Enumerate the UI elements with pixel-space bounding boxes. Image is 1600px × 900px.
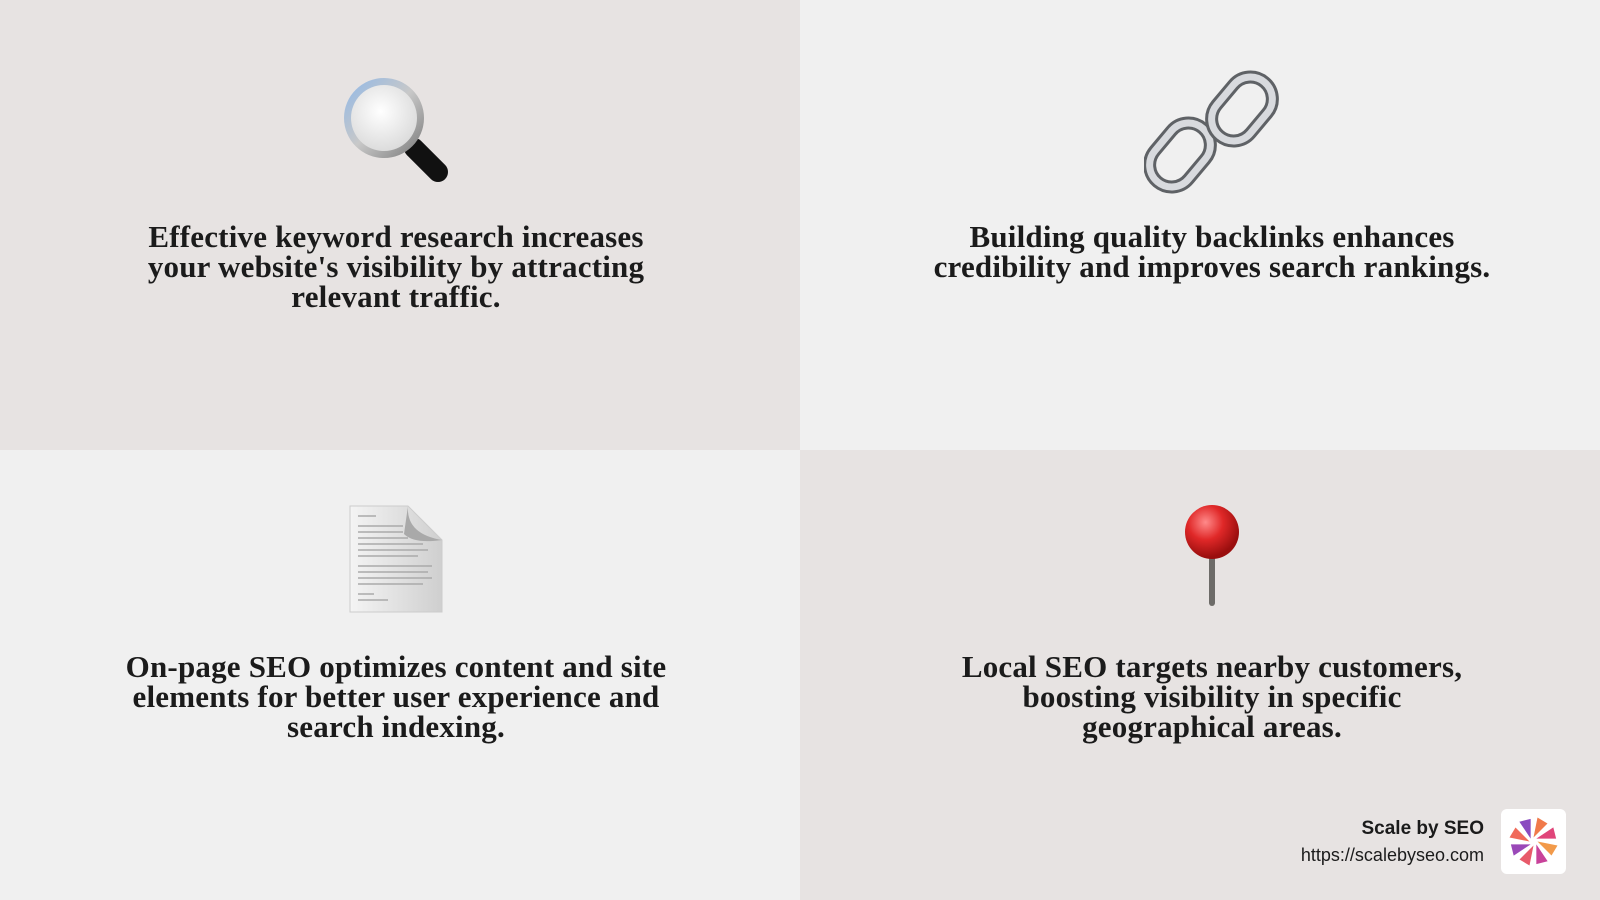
icon: chain link xyxy=(1144,70,1279,194)
text: local SEO: geographical areas. xyxy=(1082,709,1342,744)
text: backlinks: credibility and improves search rankings. xyxy=(934,249,1490,284)
text: keyword research xyxy=(148,219,644,314)
text: local SEO xyxy=(962,649,1462,744)
text: keyword research: relevant traffic. xyxy=(291,279,501,314)
brand text: https://scalebyseo.com xyxy=(1301,845,1484,865)
text: on-page SEO: elements for better user experience and xyxy=(133,679,659,714)
text: keyword research: your website's visibility by attracting xyxy=(148,249,644,284)
icon: document xyxy=(350,506,442,612)
text: backlinks: Building quality backlinks enhances xyxy=(969,219,1455,254)
text: backlinks xyxy=(934,219,1490,284)
panel: on-page SEO xyxy=(0,450,800,900)
panel: keyword research xyxy=(0,0,800,450)
icon: magnifying glass xyxy=(344,78,448,182)
panel: local SEO xyxy=(800,450,1600,900)
text: on-page SEO: search indexing. xyxy=(287,709,505,744)
text: keyword research: Effective keyword research increases xyxy=(148,219,644,254)
text: on-page SEO: On-page SEO optimizes content and site xyxy=(126,649,666,684)
logo xyxy=(1501,809,1566,874)
text: local SEO: Local SEO targets nearby customers, xyxy=(962,649,1462,684)
icon: map pin xyxy=(1185,505,1239,606)
brand text: Scale by SEO xyxy=(1361,818,1484,839)
text: local SEO: boosting visibility in specific xyxy=(1022,679,1402,714)
text: on-page SEO xyxy=(126,649,666,744)
brand text xyxy=(1301,818,1484,865)
panel: backlinks xyxy=(800,0,1600,450)
